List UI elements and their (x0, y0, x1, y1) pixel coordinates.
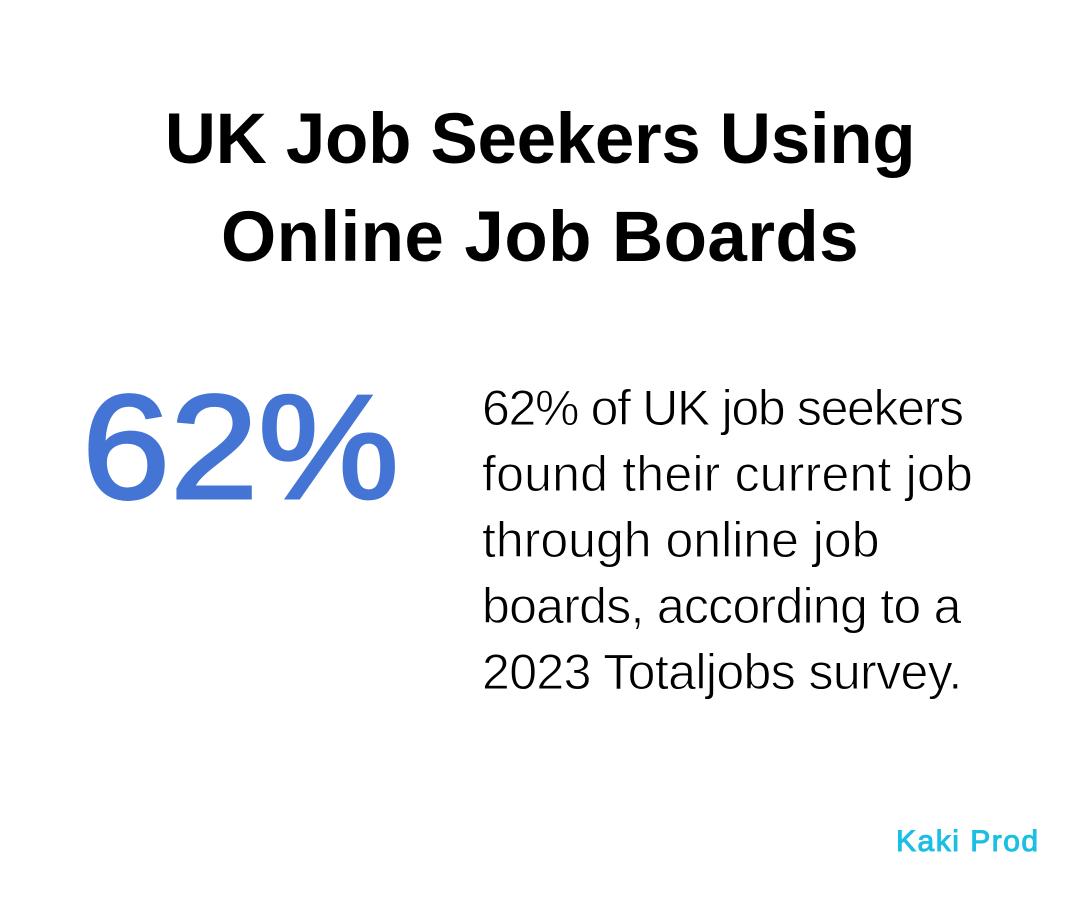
description text: through online job (482, 512, 880, 568)
title (165, 100, 915, 277)
description text: 2023 Totaljobs survey. (482, 644, 962, 700)
description text: 62% of UK job seekers (482, 380, 963, 436)
big statistic: 62% (82, 365, 399, 530)
description text: found their current job (482, 446, 973, 502)
description text (482, 380, 973, 700)
logo: Kaki Prod: Kaki Prod (896, 825, 1040, 858)
title: Online Job Boards (221, 198, 859, 277)
description text: boards, according to a (482, 578, 961, 634)
title: UK Job Seekers Using (165, 100, 915, 179)
